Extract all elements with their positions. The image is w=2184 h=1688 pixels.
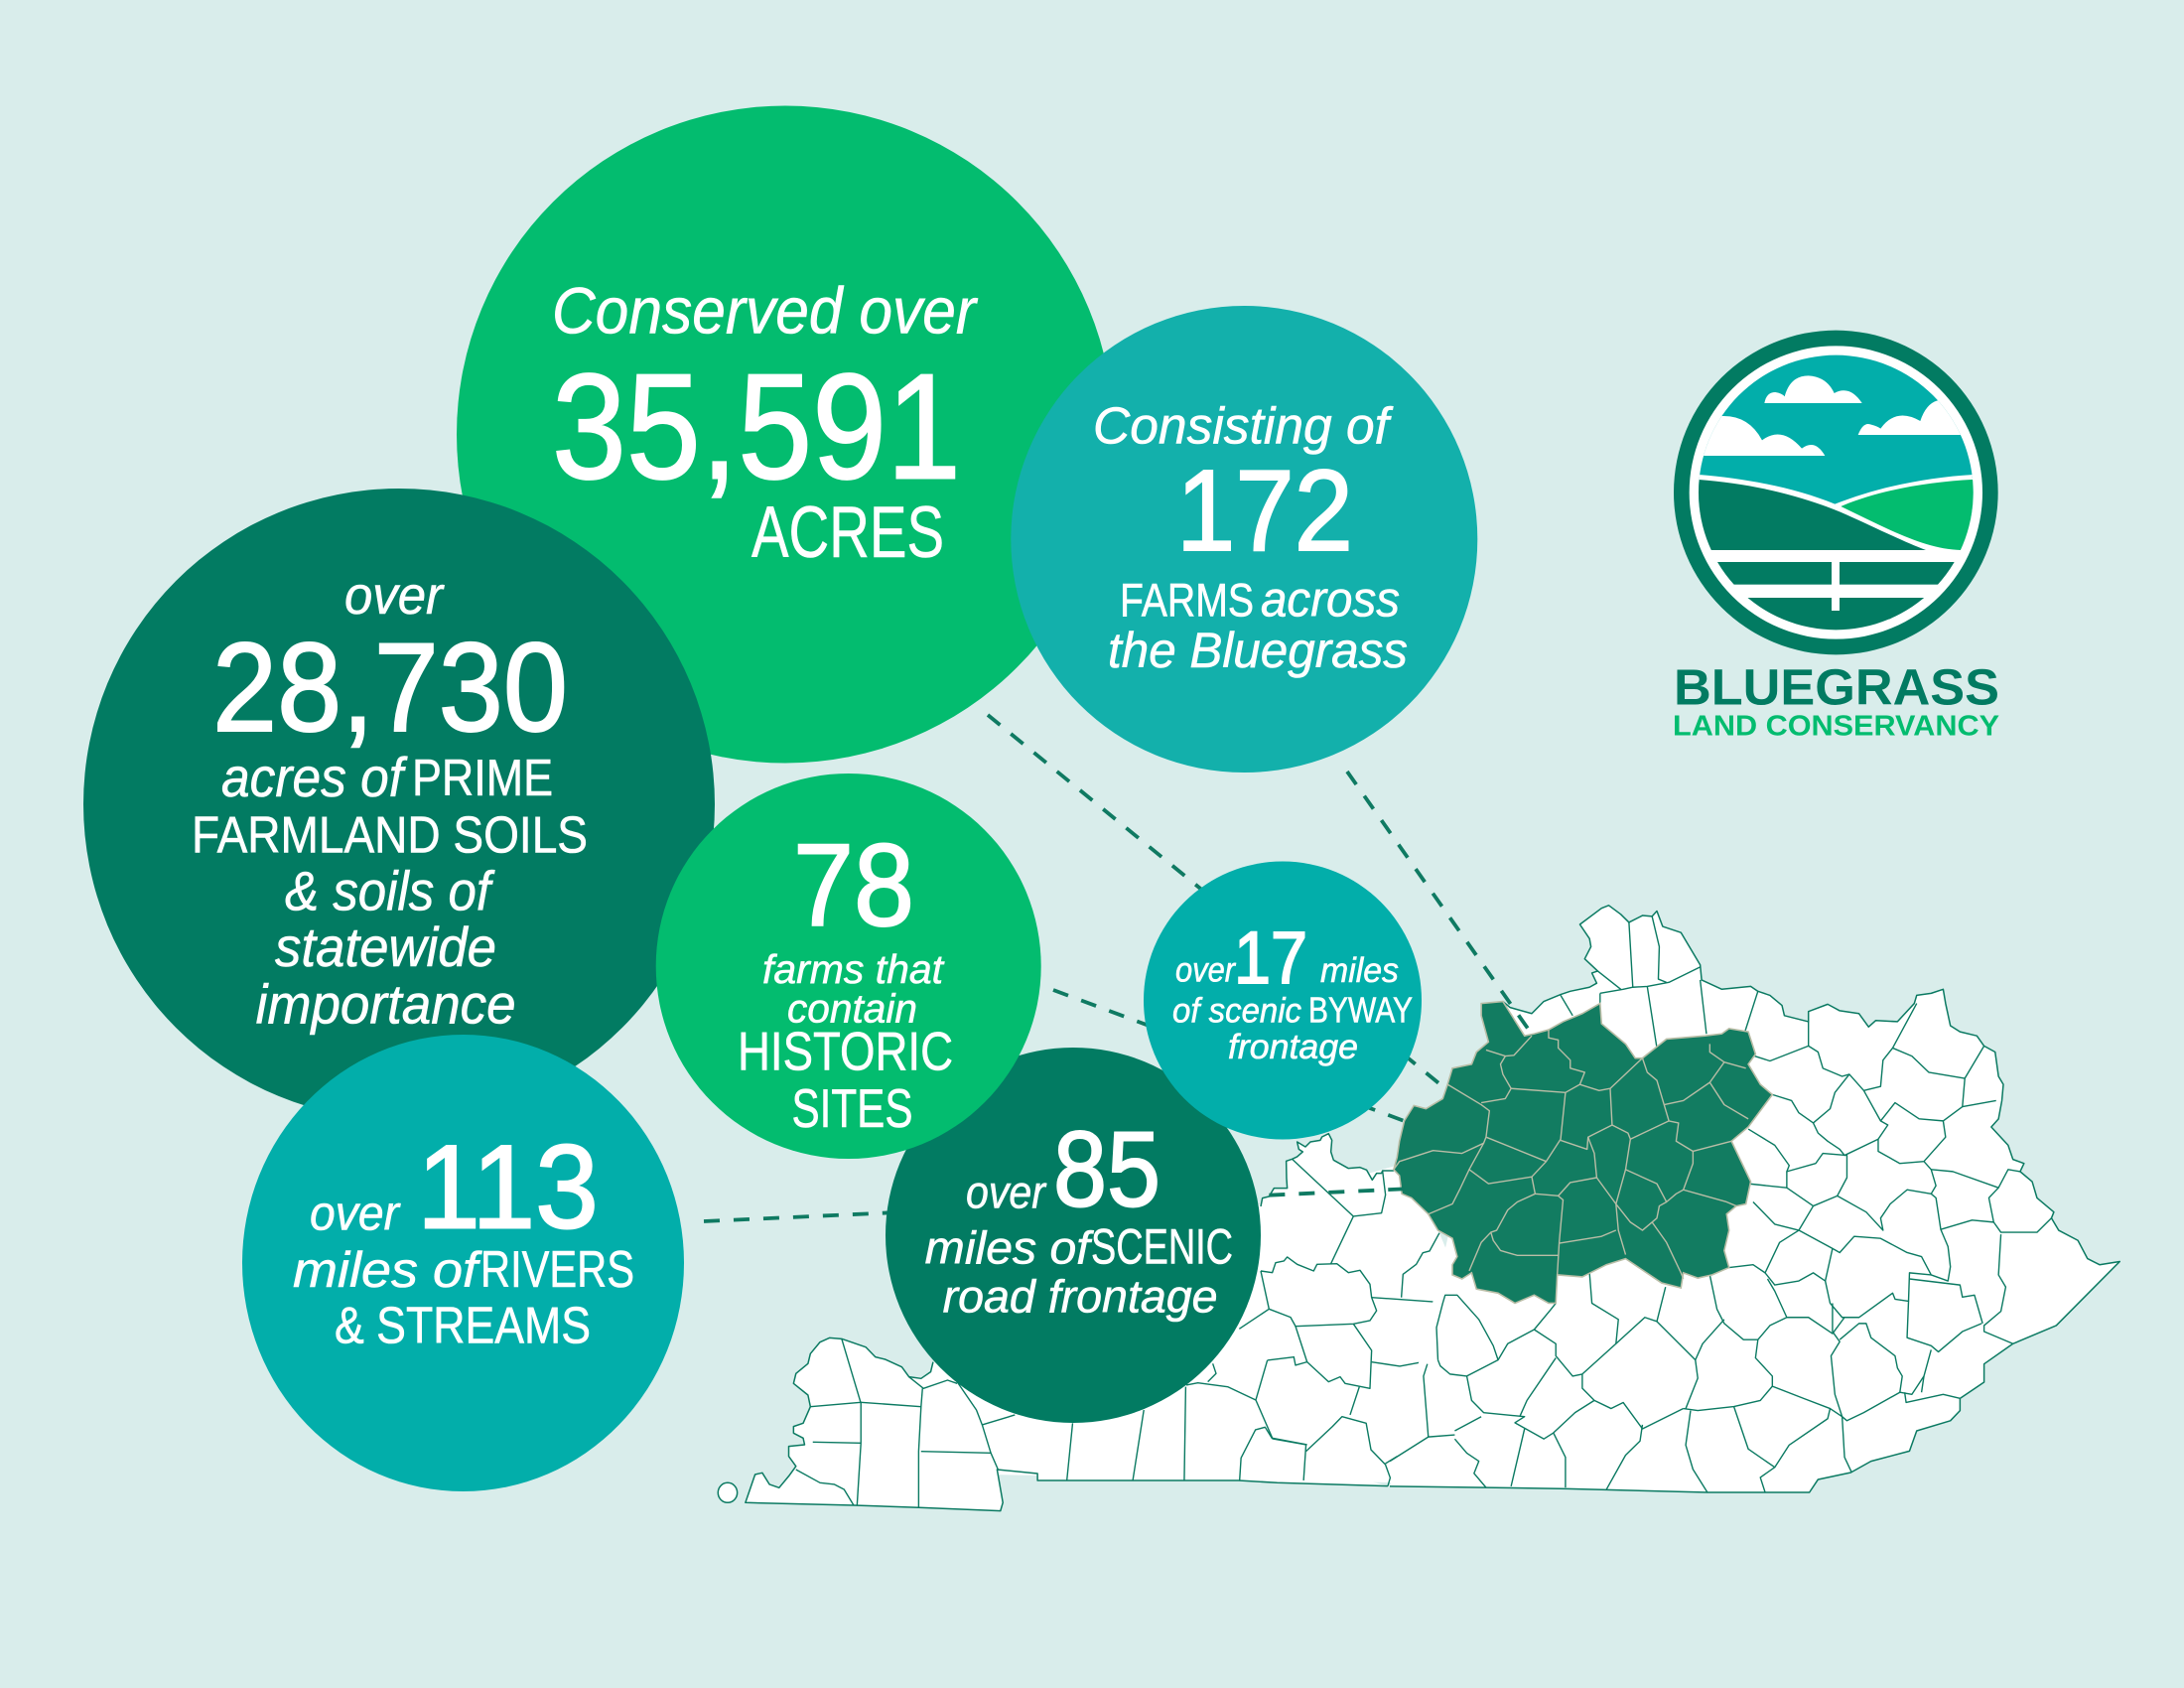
text: of scenic BYWAY <box>1172 989 1413 1030</box>
text: over: over <box>344 566 445 626</box>
dashed connector: 78 farms to map <box>1053 990 1410 1123</box>
text: over: over <box>310 1187 401 1240</box>
text: miles of RIVERS: miles of <box>293 1242 483 1298</box>
text: HISTORIC: HISTORIC <box>738 1021 953 1082</box>
text: farms that: farms that <box>762 946 945 992</box>
text: & soils of: & soils of <box>285 860 495 921</box>
panel: 113 miles of rivers <box>242 1035 684 1491</box>
number: 17: 17 <box>1234 916 1307 999</box>
panel: 17 miles of byway <box>1144 862 1422 1140</box>
text: FARMLAND SOILS: FARMLAND SOILS <box>192 807 588 865</box>
text: road frontage: road frontage <box>943 1271 1218 1323</box>
text: contain: contain <box>787 985 917 1031</box>
text: & STREAMS: & STREAMS <box>335 1298 591 1355</box>
text: miles of SCENIC <box>925 1219 1233 1275</box>
panel: 35,591 acres <box>457 105 1114 763</box>
map: eastern Kentucky counties <box>1390 906 2119 1492</box>
text: FARMS across: FARMS <box>1120 575 1254 628</box>
text: Conserved over: Conserved over <box>552 274 979 348</box>
text: over: over <box>1175 950 1236 989</box>
text: miles of RIVERS <box>293 1241 634 1299</box>
number: 78: 78 <box>793 820 914 951</box>
dashed connector: 172 farms to map <box>1347 772 1531 1033</box>
text: miles: miles <box>1320 951 1399 990</box>
number: 28,730: 28,730 <box>212 617 568 758</box>
infographic canvas <box>83 105 2120 1511</box>
number: 113: 113 <box>417 1121 599 1254</box>
panel: 28,730 acres <box>83 489 715 1120</box>
logo text: LAND CONSERVANCY: LAND CONSERVANCY <box>1673 711 1999 743</box>
text: of scenic BYWAY: BYWAY <box>1308 989 1413 1030</box>
logo: Bluegrass Land Conservancy <box>1673 331 1999 743</box>
text: ACRES: ACRES <box>751 492 944 573</box>
dashed connector: 113 miles to map <box>704 1189 1413 1221</box>
text: acres of PRIME: PRIME <box>412 750 553 807</box>
text: the Bluegrass: the Bluegrass <box>1108 623 1408 678</box>
logo text: BLUEGRASS: BLUEGRASS <box>1674 658 1999 715</box>
text: of scenic BYWAY: of scenic <box>1172 991 1301 1030</box>
map: Kentucky counties <box>718 906 2119 1511</box>
text: Consisting of: Consisting of <box>1093 398 1394 456</box>
text: FARMS across <box>1120 572 1400 628</box>
map: western Kentucky counties <box>718 1337 1429 1511</box>
text: miles of SCENIC: SCENIC <box>1091 1219 1233 1275</box>
text: miles of SCENIC: miles of <box>925 1222 1094 1274</box>
panel: 85 miles of scenic road <box>886 1048 1261 1423</box>
text: acres of PRIME <box>221 746 553 808</box>
text: miles of RIVERS: RIVERS <box>480 1241 634 1299</box>
text: importance: importance <box>256 973 516 1036</box>
map: Bluegrass service region <box>1394 1002 1772 1303</box>
number: 172: 172 <box>1176 446 1353 575</box>
text: over: over <box>966 1167 1047 1218</box>
panel: 78 historic farms <box>656 774 1041 1159</box>
text: SITES: SITES <box>792 1077 913 1139</box>
number: 85: 85 <box>1053 1108 1160 1228</box>
panel: 172 farms <box>1011 306 1477 773</box>
text: frontage: frontage <box>1228 1028 1358 1066</box>
text: statewide: statewide <box>275 915 496 978</box>
dashed connector: 35,591 acres to map <box>988 715 1447 1090</box>
map: central Kentucky counties <box>1186 1134 1442 1445</box>
text: acres of PRIME: acres of <box>221 746 408 808</box>
icon: landscape emblem <box>1674 331 1998 654</box>
text: FARMS across: across <box>1261 572 1400 628</box>
number: 35,591: 35,591 <box>552 342 961 510</box>
